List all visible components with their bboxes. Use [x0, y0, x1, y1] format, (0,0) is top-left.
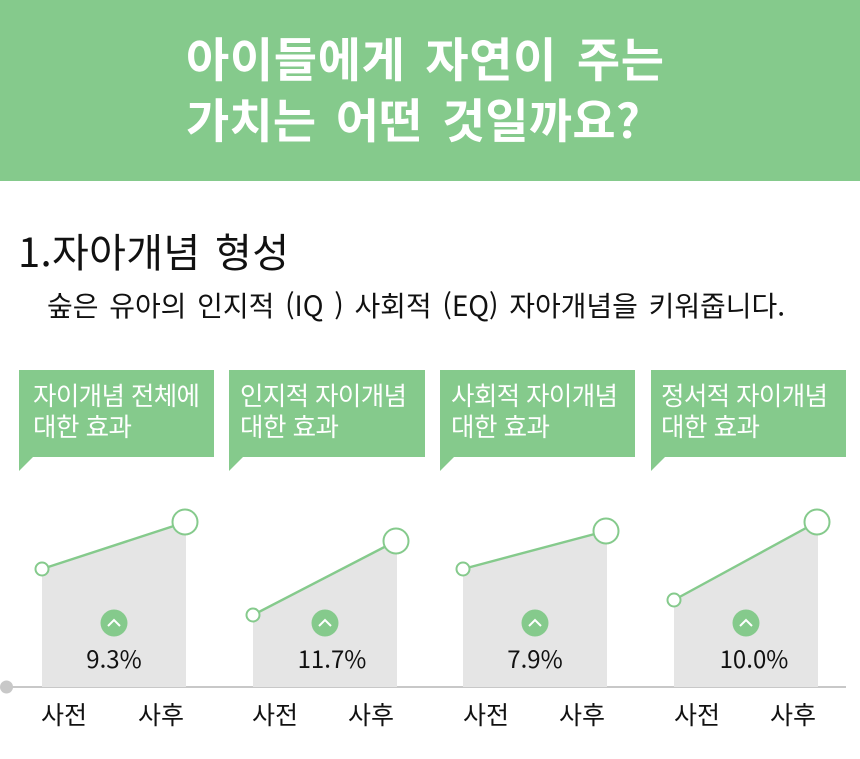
percent value: 7.9%: [507, 640, 563, 675]
panel: cognitive self-concept: [229, 370, 425, 732]
axis labels: 사후: [348, 696, 394, 732]
percent value: 9.3%: [86, 640, 142, 675]
axis labels: 사후: [770, 696, 816, 732]
axis labels: [252, 696, 394, 732]
callout: [651, 370, 846, 471]
axis labels: 사후: [138, 696, 184, 732]
section description: 숲은 유아의 인지적 (IQ ) 사회적 (EQ) 자아개념을 키워줍니다.: [47, 285, 785, 325]
title: 가치는 어떤 것일까요?: [186, 83, 640, 152]
axis labels: 사전: [463, 696, 509, 732]
line chart: [246, 528, 408, 687]
axis labels: [674, 696, 816, 732]
percent value: 10.0%: [720, 640, 788, 675]
axis labels: [463, 696, 605, 732]
icon: up arrow: [312, 610, 338, 636]
panel: emotional self-concept: [651, 370, 846, 732]
callout: 대한 효과: [661, 407, 760, 444]
title: [186, 22, 664, 152]
axis labels: 사전: [41, 696, 87, 732]
callout: 대한 효과: [33, 407, 132, 444]
line chart: [36, 510, 198, 687]
callout: 정서적 자이개념: [661, 376, 828, 413]
line chart: [668, 510, 830, 687]
callout: [19, 370, 214, 471]
callout: 대한 효과: [451, 407, 550, 444]
icon: up arrow: [522, 610, 548, 636]
percent value: 11.7%: [298, 640, 366, 675]
axis labels: [41, 696, 184, 732]
callout: 대한 효과: [240, 407, 339, 444]
header banner: [0, 0, 860, 181]
section heading: 1.자아개념 형성: [18, 221, 289, 279]
callout: [440, 370, 635, 471]
title: 아이들에게 자연이 주는: [186, 22, 664, 91]
callout: [229, 370, 425, 471]
icon: up arrow: [732, 610, 760, 636]
axis labels: 사후: [559, 696, 605, 732]
axis line: [0, 680, 846, 694]
panel: social self-concept: [440, 370, 635, 732]
axis labels: 사전: [252, 696, 298, 732]
callout: 자이개념 전체에: [33, 376, 200, 413]
callout: 사회적 자이개념: [451, 376, 618, 413]
callout: 인지적 자이개념: [240, 376, 407, 413]
axis labels: 사전: [674, 696, 720, 732]
icon: up arrow: [100, 610, 128, 636]
panel: overall self-concept: [19, 370, 214, 732]
line chart: [456, 518, 618, 687]
